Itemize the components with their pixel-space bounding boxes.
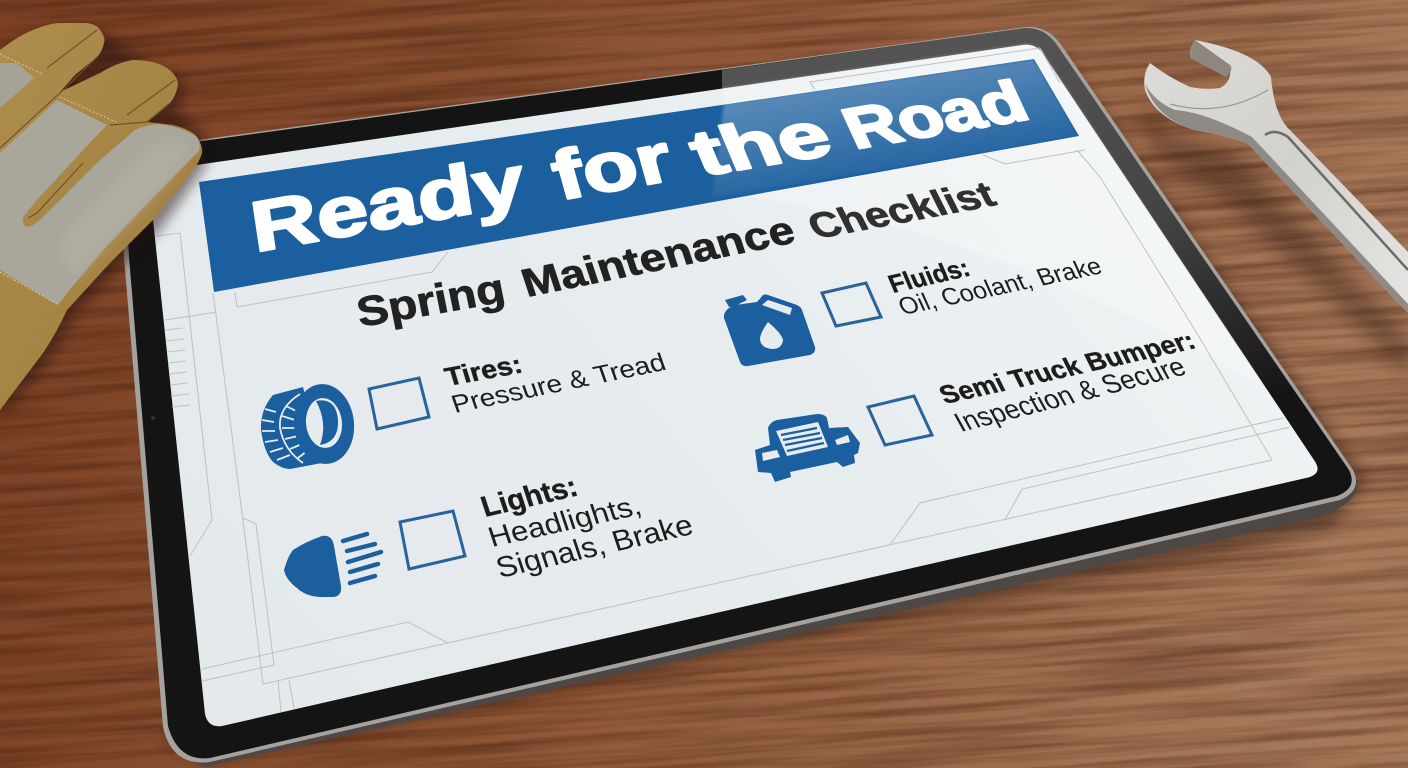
wrench jaw inner face [1190,40,1231,77]
checkbox: fluids [822,283,881,326]
title: Ready for the Road: Ready [245,140,529,267]
title: Ready for the Road: the [679,99,842,189]
icon: tire [261,381,358,469]
label: lights: Signals, Brake [492,509,697,585]
label: lights: Lights: [477,471,582,524]
work glove [0,23,206,416]
camera dot [151,416,155,420]
icon: fluid jug with drop [724,294,815,366]
glove creases [0,30,175,218]
subtitle: Spring Maintenance Checklist: Maintenance [516,209,800,306]
label: lights [477,471,697,585]
checklist item: fluids [724,253,1106,366]
screen glare [722,45,1262,385]
icon: semi truck front [755,414,860,482]
header banner [199,59,1079,292]
label: fluids: Fluids: [884,254,974,299]
glove shadow [0,24,206,416]
wrench body [1144,40,1408,313]
glove leather body [0,23,202,410]
checkbox: tires [369,378,429,429]
title: Ready for the Road [245,70,1038,267]
tablet side band [166,480,1358,767]
checklist item: tires [261,349,670,469]
wrench [1143,40,1408,375]
label: bumper: Inspection & Secure [949,351,1191,438]
checklist item: semi truck bumper [755,327,1200,482]
wrench shadow [1143,96,1408,375]
wrench head highlight edge [1170,90,1268,109]
label: bumper [935,327,1200,438]
label: bumper: Semi Truck Bumper: [935,327,1200,410]
banner glare [712,59,1079,198]
glove grey patch: finger one [0,63,34,108]
label: lights: Headlights, [484,489,645,553]
label: tires: Tires: [442,350,526,392]
checklist item: lights [284,471,697,597]
label: tires: Pressure & Tread [448,349,670,419]
wrench lower shaded edge [1145,84,1408,313]
icon: headlight [284,534,381,597]
checkbox: lights [400,511,465,569]
subtitle: Spring Maintenance Checklist [353,173,1002,336]
label: fluids: Oil, Coolant, Brake [894,253,1106,321]
bezel glare [722,28,1349,470]
title: Ready for the Road: for [543,119,680,215]
glove stitching [0,54,116,304]
glove palm lighter patch [62,142,188,275]
checkbox: bumper [868,396,932,445]
subtitle: Spring Maintenance Checklist: Checklist [800,173,1002,247]
title: Ready for the Road: Road [833,70,1038,161]
subtitle: Spring Maintenance Checklist: Spring [353,265,509,336]
glove grey patch: palm and fingers [0,100,200,305]
blueprint line details [157,48,1290,712]
tablet shadow [160,50,1368,764]
wrench handle groove [1265,132,1408,270]
tablet screen [148,45,1318,726]
